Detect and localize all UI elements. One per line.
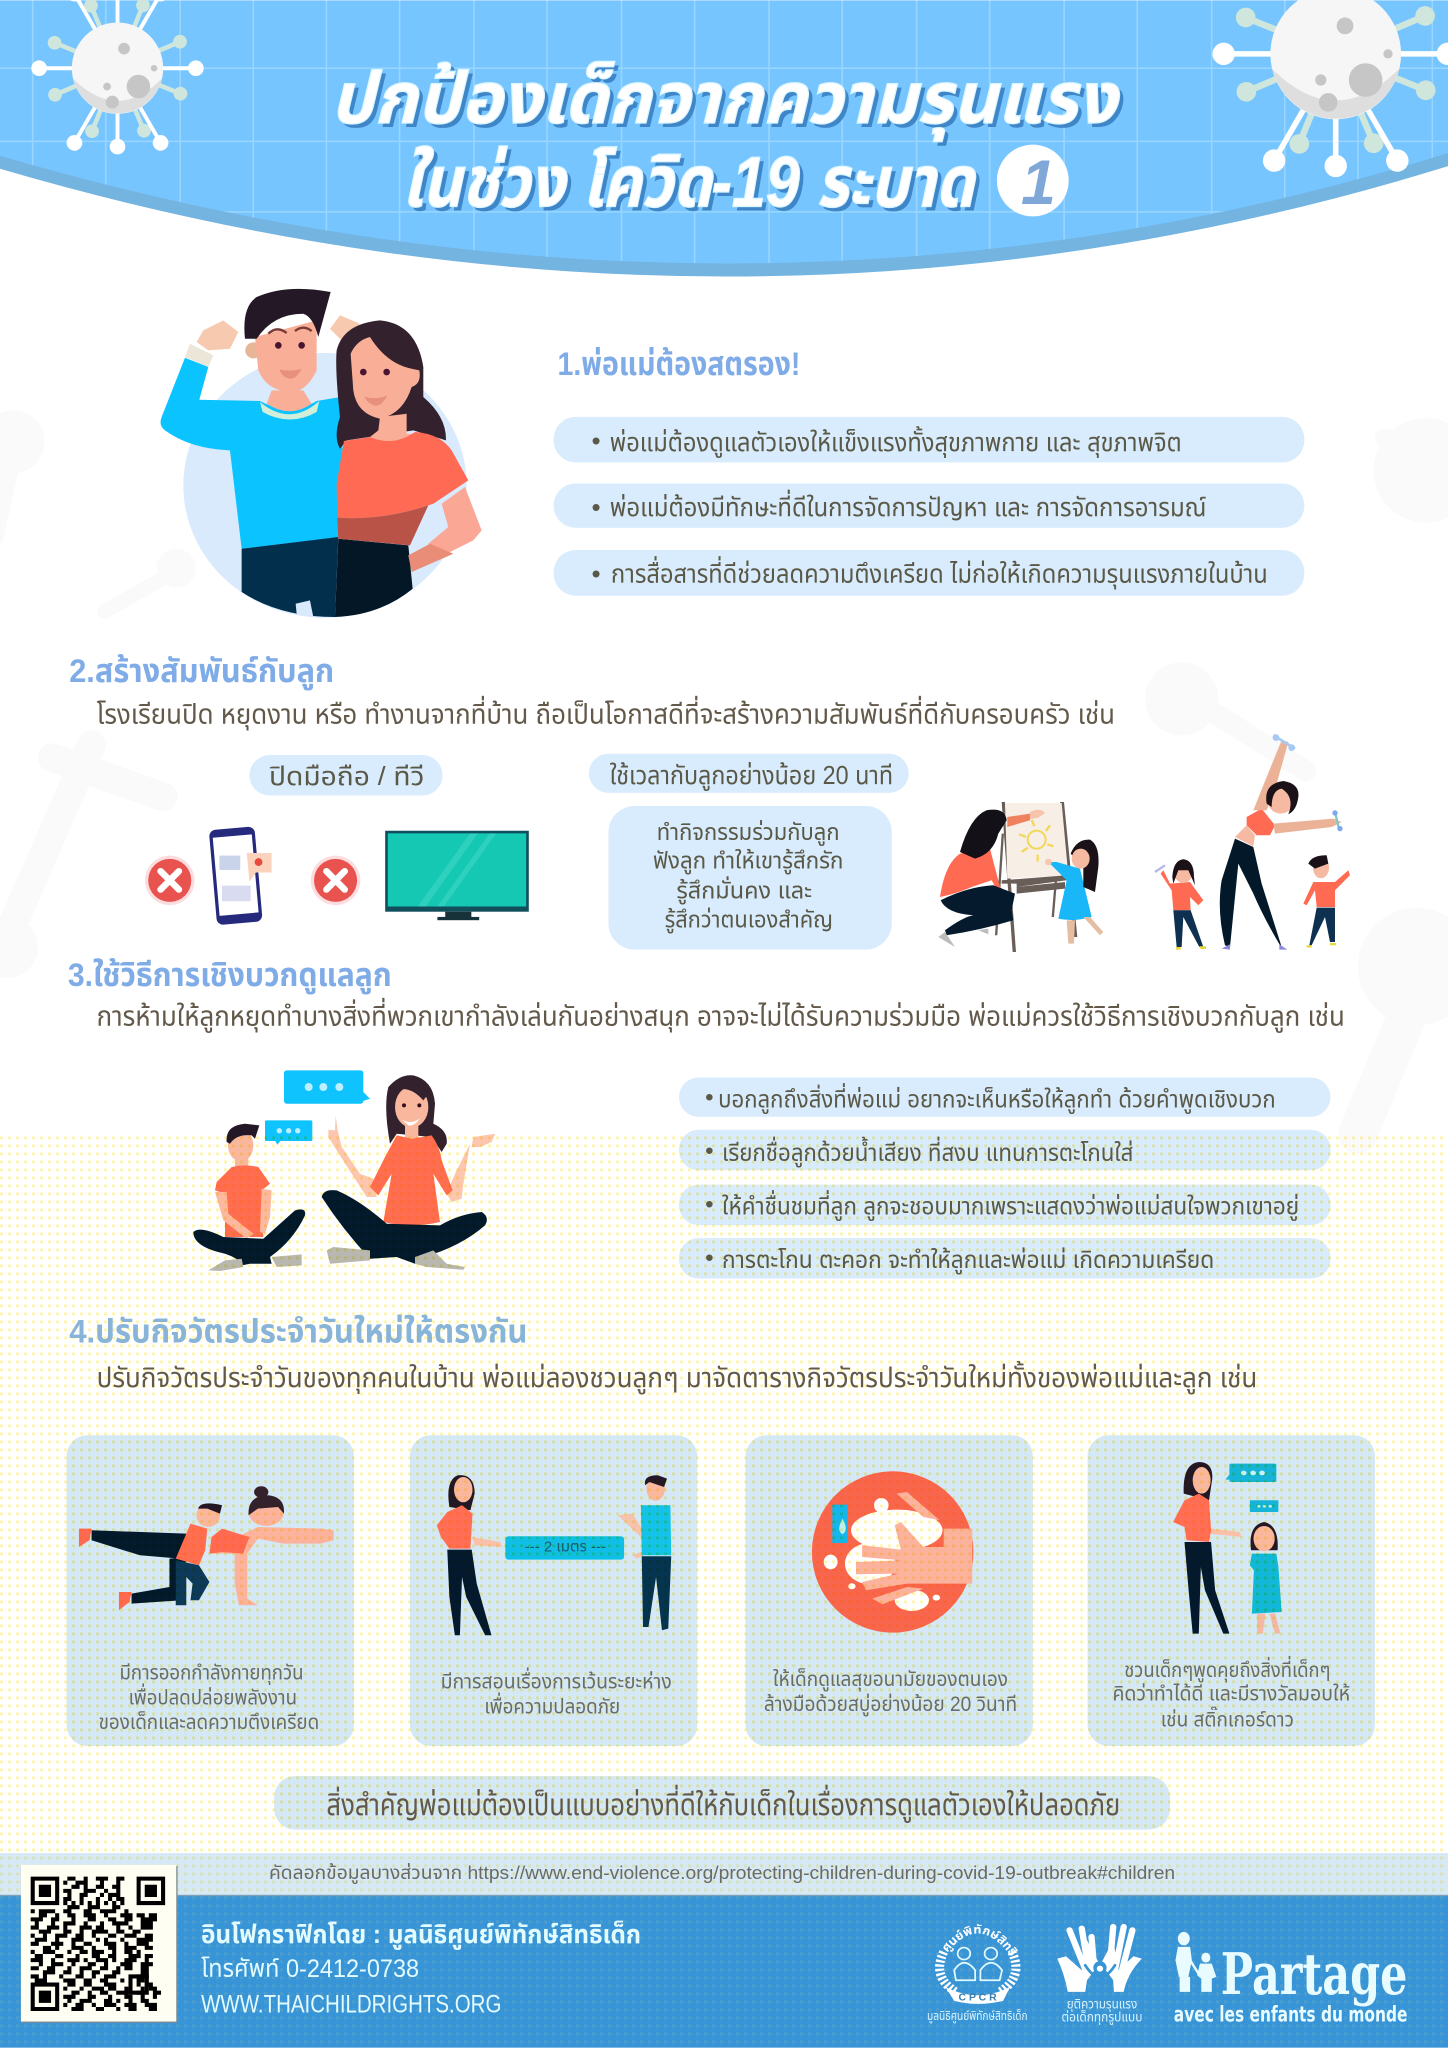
header banner [0, 0, 1448, 301]
logo: Partage family [1175, 1932, 1216, 1992]
logo caption stop violence: ยุติความรุนแรง [1067, 1996, 1137, 2011]
pill: phone and tv off [249, 755, 443, 796]
bullet panel 2 [554, 483, 1304, 528]
logo: CPCR [935, 1924, 1020, 2004]
intro text 2: โรงเรียนปิด หยุดงาน หรือ ทำงานจากที่บ้าน ถือเป็นโอกาสดีที่จะสร้างความสัมพันธ์ที่ดีกับครอบครัว เช่น [97, 696, 1115, 731]
pill: phone and tv off: ปิดมือถือ / ทีวี [269, 761, 424, 791]
closing message: สิ่งสำคัญพ่อแม่ต้องเป็นแบบอย่างที่ดีให้กับเด็กในเรื่องการดูแลตัวเองให้ปลอดภัย [326, 1784, 1120, 1823]
title: ปกป้องเด็กจากความรุนแรง [334, 63, 1124, 146]
heading 2: 2.สร้างสัมพันธ์กับลูก [69, 652, 334, 690]
logo: stop violence hands [1057, 1927, 1142, 1992]
bullet panel 2: • [591, 492, 601, 522]
bullet text section 3: • [705, 1084, 714, 1111]
bullet panel 2: พ่อแม่ต้องมีทักษะที่ดีในการจัดการปัญหา และ การจัดการอารมณ์ [610, 489, 1206, 522]
pill: spend 20 minutes [589, 754, 909, 793]
logo caption stop violence [1062, 1996, 1142, 2025]
bullet text section 3: เรียกชื่อลูกด้วยน้ำเสียง ที่สงบ แทนการตะโกนใส่ [722, 1136, 1133, 1168]
website: WWW.THAICHILDRIGHTS.ORG [201, 1991, 501, 2018]
footer [0, 1864, 1448, 2048]
card text 1: ของเด็กและลดความตึงเครียด [99, 1709, 319, 1734]
icon: virus right [1215, 0, 1448, 174]
illustration: talking with daughter [1173, 1462, 1282, 1634]
bullet text section 3: • [705, 1245, 714, 1272]
bullet text section 3 [705, 1083, 1299, 1275]
illustration: painting and exercising with children [938, 734, 1350, 952]
icon: red cross 1 [145, 856, 195, 905]
panel: activities: รู้สึกมั่นคง และ [676, 876, 812, 906]
bullet panel 1: พ่อแม่ต้องดูแลตัวเองให้แข็งแรงทั้งสุขภาพกาย และ สุขภาพจิต [610, 425, 1182, 458]
logo caption stop violence: ต่อเด็กทุกรูปแบบ [1062, 2010, 1142, 2025]
card text 1: มีการออกกำลังกายทุกวัน [119, 1661, 304, 1685]
yellow dotted background [0, 1135, 1448, 1853]
footer source band [0, 1853, 1448, 1895]
panel: activities: ทำกิจกรรมร่วมกับลูก [657, 819, 840, 847]
bullet text section 3: บอกลูกถึงสิ่งที่พ่อแม่ อยากจะเห็นหรือให้ลูกทำ ด้วยคำพูดเชิงบวก [718, 1083, 1276, 1115]
heading 3: 3.ใช้วิธีการเชิงบวกดูแลลูก [68, 956, 392, 994]
title: ในช่วง โควิด-19 ระบาด [406, 147, 981, 227]
background watermark virus shapes [0, 410, 1448, 1134]
card text 3: ให้เด็กดูแลสุขอนามัยของตนเอง [773, 1666, 1008, 1692]
card text 4: เช่น สติ๊กเกอร์ดาว [1161, 1706, 1294, 1731]
bullet text section 3: การตะโกน ตะคอก จะทำให้ลูกและพ่อแม่ เกิดความเครียด [722, 1246, 1214, 1275]
QR code [21, 1865, 178, 2023]
dotted overlay on source band [0, 1853, 1448, 1895]
logo: CPCR: C P C R [958, 1992, 997, 2003]
closing banner panel [274, 1776, 1170, 1830]
card text 1: เพื่อปลดปล่อยพลังงาน [129, 1682, 297, 1709]
title: ในช่วง โควิด-19 ระบาด [402, 143, 977, 223]
bullet text section 3: • [705, 1191, 714, 1218]
bullet panel 1 [554, 417, 1304, 463]
section 4 cards [67, 1435, 1375, 1746]
card text 2: มีการสอนเรื่องการเว้นระยะห่าง [441, 1667, 672, 1694]
icon: red cross 2 [311, 856, 360, 905]
pill: spend 20 minutes: ใช้เวลากับลูกอย่างน้อย 20 นาที [610, 760, 893, 791]
logo caption CPCR: มูลนิธิศูนย์พิทักษ์สิทธิเด็ก [927, 2009, 1028, 2023]
panel: activities [608, 806, 892, 950]
label: 2 metres: --- 2 เมตร --- [525, 1538, 606, 1555]
title: 1 [1021, 148, 1056, 218]
logo: CPCR: ศูนย์พิทักษ์สิทธิเด็ก [943, 1924, 1018, 1956]
intro text 4: ปรับกิจวัตรประจำวันของทุกคนในบ้าน พ่อแม่ลองชวนลูกๆ มาจัดตารางกิจวัตรประจำวันใหม่ทั้งของพ่อแม่และลูก เช่น [97, 1361, 1257, 1394]
title: ปกป้องเด็กจากความรุนแรง [330, 59, 1120, 142]
phone number: โทรศัพท์ 0-2412-0738 [201, 1956, 419, 1983]
card text 2 [441, 1667, 672, 1718]
bullet list panels section 3 [679, 1078, 1330, 1279]
bullet panel 3 [554, 550, 1304, 596]
icon: virus left [33, 0, 202, 152]
illustration: parent and child talking [193, 1070, 495, 1271]
bullet text section 3: • [705, 1137, 714, 1164]
title [330, 59, 1124, 227]
panel: activities: ฟังลูก ทำให้เขารู้สึกรัก [653, 848, 843, 876]
card text 4: คิดว่าทำได้ดี และมีรางวัลมอบให้ [1112, 1681, 1350, 1705]
card text 1 [99, 1661, 319, 1734]
card text 4: ชวนเด็กๆพูดคุยถึงสิ่งที่เด็กๆ [1124, 1655, 1330, 1683]
illustration: exercising together [79, 1475, 671, 1635]
icon: phone [209, 826, 272, 925]
bullet panel 3: การสื่อสารที่ดีช่วยลดความตึงเครียด ไม่ก่อให้เกิดความรุนแรงภายในบ้าน [611, 556, 1268, 590]
card text 3 [764, 1666, 1017, 1717]
illustration: hand washing [812, 1471, 974, 1633]
icon: television [385, 831, 529, 920]
intro text 3: การห้ามให้ลูกหยุดทำบางสิ่งที่พวกเขากำลังเล่นกันอย่างสนุก อาจจะไม่ได้รับความร่วมมือ พ่อแม่ควรใช้วิธีการเชิงบวกกับลูก เช่น [97, 997, 1345, 1032]
bullet text section 3: ให้คำชื่นชมที่ลูก ลูกจะชอบมากเพราะแสดงว่าพ่อแม่สนใจพวกเขาอยู่ [722, 1190, 1299, 1222]
bullet panel 1: • [591, 426, 601, 456]
card text 3: ล้างมือด้วยสบู่อย่างน้อย 20 วินาที [764, 1692, 1017, 1717]
panel: activities: รู้สึกว่าตนเองสำคัญ [665, 906, 833, 934]
heading 1: 1.พ่อแม่ต้องสตรอง! [558, 345, 800, 382]
organisation name: อินโฟกราฟิกโดย : มูลนิธิศูนย์พิทักษ์สิทธิเด็ก [201, 1919, 641, 1950]
heading 4: 4.ปรับกิจวัตรประจำวันใหม่ให้ตรงกัน [69, 1313, 527, 1350]
card text 4 [1112, 1655, 1350, 1731]
bullet panel 3: • [591, 559, 601, 589]
source note: คัดลอกข้อมูลบางส่วนจาก https://www.end-violence.org/protecting-children-during-covid-19-outbreak#children [269, 1862, 1175, 1885]
illustration: strong parents [161, 289, 482, 618]
card text 2: เพื่อความปลอดภัย [484, 1691, 620, 1718]
